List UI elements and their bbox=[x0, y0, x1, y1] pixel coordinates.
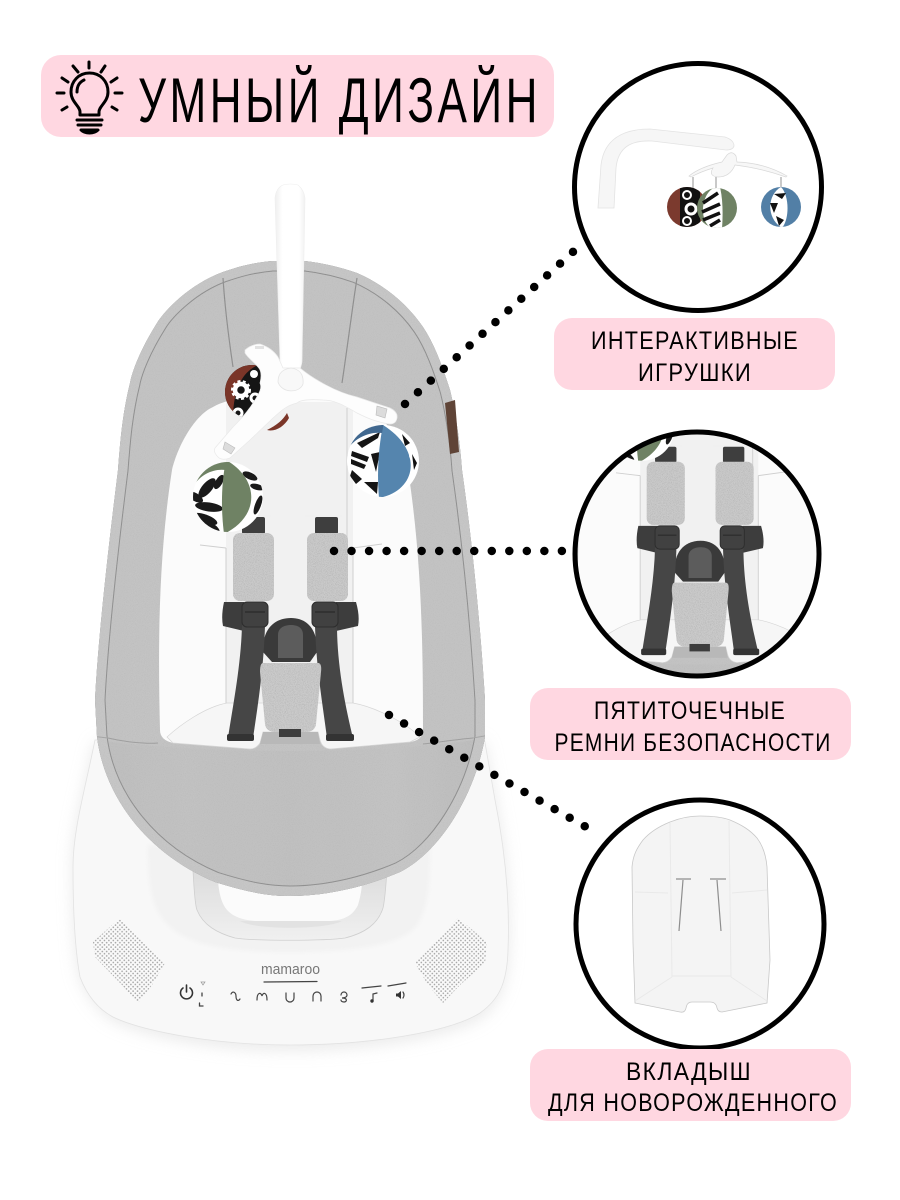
hub bbox=[278, 368, 303, 391]
handle lower shade bbox=[240, 921, 342, 928]
connector dots: harness bbox=[334, 547, 563, 555]
right speaker bbox=[415, 918, 487, 1003]
insert seams bbox=[635, 821, 767, 1001]
connector dots: toys bbox=[405, 251, 574, 404]
green ball panels bbox=[222, 460, 251, 534]
arm inserts bbox=[223, 406, 387, 454]
mobile strings bbox=[693, 177, 781, 190]
callout: interactive toys circle bbox=[574, 64, 822, 310]
mini blue ball bbox=[761, 187, 801, 228]
base shadow bbox=[73, 742, 508, 1050]
label: interactive toys: ИГРУШКИ bbox=[638, 359, 752, 387]
toy: blue ball bbox=[347, 425, 419, 497]
insert centre column bbox=[226, 402, 353, 703]
insert outline bbox=[632, 816, 770, 1012]
gear print bbox=[235, 384, 247, 396]
lateral straps bbox=[222, 602, 359, 631]
rim joint lines bbox=[90, 735, 490, 738]
left speaker fade bbox=[93, 918, 165, 1003]
seat shell bbox=[80, 250, 500, 910]
label: newborn insert bbox=[530, 1049, 851, 1121]
mobile mini arms bbox=[689, 153, 787, 177]
left speaker bbox=[93, 918, 165, 1003]
leg straps bbox=[228, 625, 353, 738]
label: five-point harness: РЕМНИ БЕЗОПАСНОСТИ bbox=[554, 729, 832, 757]
label: five-point harness bbox=[530, 688, 851, 760]
crotch tab bbox=[279, 729, 301, 737]
label: interactive toys: ИНТЕРАКТИВНЫЕ bbox=[591, 327, 799, 355]
control panel icons bbox=[180, 982, 406, 1006]
toy mobile arms bbox=[214, 344, 397, 459]
harness slots bbox=[676, 879, 726, 931]
back seams bbox=[223, 278, 357, 383]
base recess bbox=[148, 845, 430, 952]
centre buckle body bbox=[263, 618, 317, 662]
insert cushion bbox=[159, 394, 423, 749]
mobile arch bbox=[598, 129, 734, 208]
ball fragment bbox=[627, 437, 673, 461]
label: newborn insert: ВКЛАДЫШ bbox=[626, 1058, 752, 1086]
shadow below insert bbox=[260, 732, 320, 744]
right speaker fade bbox=[415, 918, 487, 1003]
red ball panel bbox=[225, 365, 256, 412]
shoulder buckles bbox=[242, 517, 265, 534]
insert seams bbox=[200, 408, 382, 703]
toy mobile pole bbox=[275, 184, 305, 375]
label: interactive toys bbox=[554, 318, 835, 390]
mini red ball bbox=[667, 187, 702, 227]
handle window bbox=[218, 880, 362, 921]
music and volume glyphs bbox=[370, 991, 401, 1003]
title banner bbox=[41, 55, 554, 137]
shoulder slots bbox=[238, 515, 342, 517]
toy: red ball bbox=[225, 365, 289, 430]
enlarged harness bbox=[578, 434, 789, 674]
brand logo: mamaroo bbox=[261, 961, 320, 978]
banner background bbox=[41, 55, 554, 137]
connector dots: insert bbox=[389, 715, 586, 827]
icon: light bulb bbox=[57, 62, 122, 133]
title text: УМНЫЙ ДИЗАЙН bbox=[138, 65, 541, 136]
mini green ball bbox=[697, 187, 737, 229]
callout: newborn insert circle bbox=[576, 800, 824, 1048]
red ball lower fragment bbox=[267, 413, 289, 430]
seat rim bbox=[95, 261, 485, 896]
label: five-point harness: ПЯТИТОЧЕЧНЫЕ bbox=[594, 697, 786, 725]
base body bbox=[73, 737, 508, 1045]
chest clips bbox=[242, 602, 268, 627]
insert seat base bbox=[167, 703, 420, 749]
strap tips bbox=[227, 734, 254, 741]
product: seat with insert and harness bbox=[80, 250, 500, 910]
centre buckle plate bbox=[278, 625, 303, 658]
blue ball panels bbox=[378, 425, 411, 498]
shoulder pads bbox=[233, 533, 348, 732]
crotch pad bbox=[260, 663, 321, 732]
leather brand tag bbox=[445, 400, 459, 454]
product: bouncer base bbox=[73, 737, 508, 1050]
handle bbox=[193, 870, 387, 940]
five-point harness bbox=[222, 516, 359, 741]
toy: green ball bbox=[185, 458, 265, 535]
seat front panel bbox=[80, 736, 500, 900]
callout: harness circle bbox=[572, 430, 822, 678]
label: newborn insert: ДЛЯ НОВОРОЖДЕННОГО bbox=[548, 1089, 838, 1117]
